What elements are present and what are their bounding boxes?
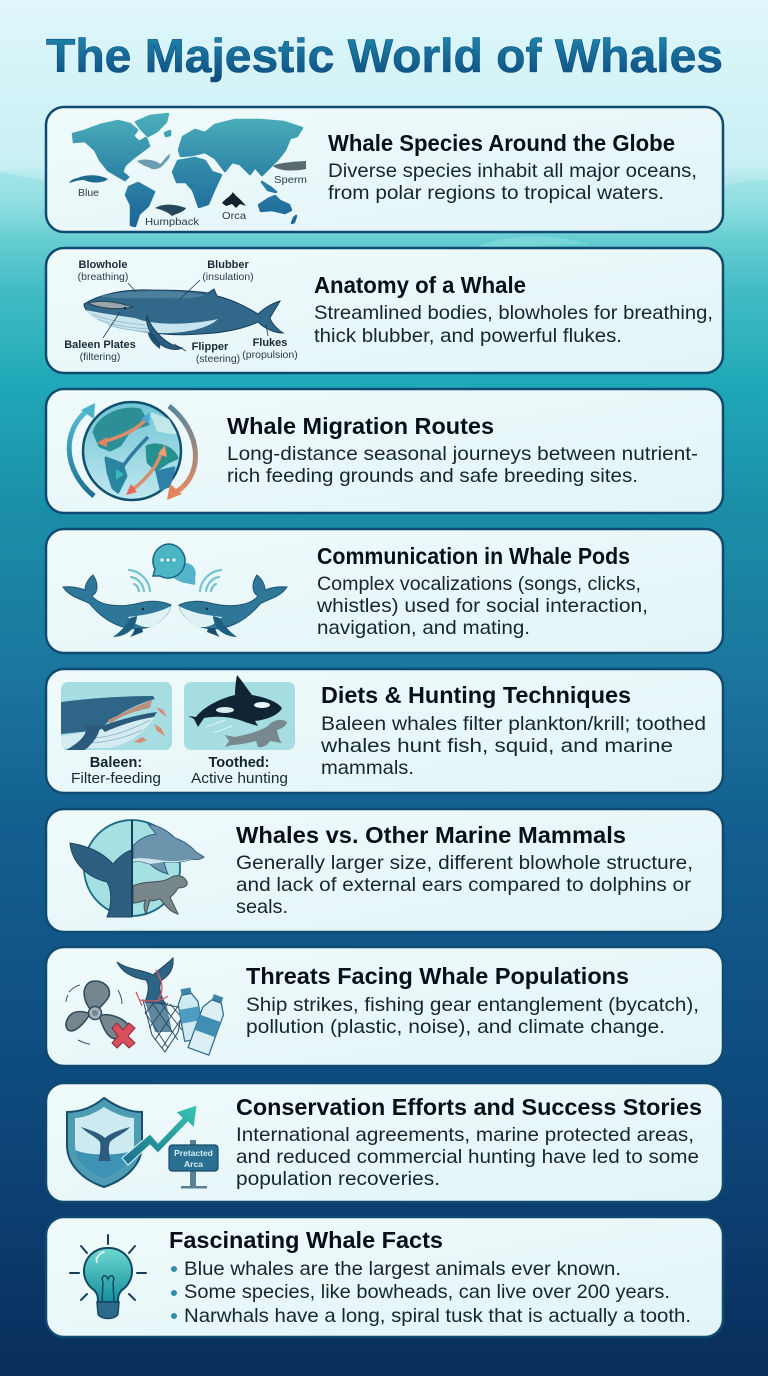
body text: whistles) used for social interaction, bbox=[316, 595, 648, 617]
body text bbox=[246, 994, 699, 1038]
label: Sperm: Sperm bbox=[274, 174, 307, 186]
body text: population recoveries. bbox=[236, 1168, 440, 1190]
heading: Fascinating Whale Facts bbox=[169, 1227, 443, 1253]
bullet list: Some species, like bowheads, can live over 200 years. bbox=[184, 1281, 670, 1303]
body text: Generally larger size, different blowhole structure, bbox=[236, 852, 693, 874]
sign: protected area: Pretacted bbox=[174, 1148, 213, 1158]
label: Blue: Blue bbox=[78, 187, 99, 199]
body text: Complex vocalizations (songs, clicks, bbox=[317, 573, 641, 595]
body text: mammals. bbox=[321, 757, 414, 779]
icon: rising arrow bbox=[122, 1105, 197, 1165]
label: blubber: (insulation) bbox=[202, 271, 254, 283]
heading: Whale Migration Routes bbox=[227, 413, 494, 439]
label: flipper: Flipper bbox=[192, 341, 229, 353]
body text bbox=[320, 713, 706, 779]
icon: globe with migration arrows bbox=[69, 402, 195, 500]
illustration: orca and seal bbox=[184, 675, 295, 750]
icon: left whale bbox=[63, 575, 171, 637]
body text bbox=[236, 852, 693, 918]
body text: Long-distance seasonal journeys between nutrient- bbox=[227, 443, 698, 465]
heading: Anatomy of a Whale bbox=[314, 272, 526, 298]
world map bbox=[73, 114, 302, 226]
icon: plastic bottles bbox=[176, 987, 229, 1055]
body text bbox=[227, 443, 698, 487]
body text bbox=[314, 302, 713, 347]
body text: International agreements, marine protected areas, bbox=[236, 1124, 694, 1146]
label: blubber bbox=[202, 259, 254, 283]
body text: from polar regions to tropical waters. bbox=[328, 182, 664, 204]
sign: protected area: Arca bbox=[184, 1159, 203, 1169]
body text: Ship strikes, fishing gear entanglement (bycatch), bbox=[246, 994, 699, 1016]
icon: propeller bbox=[66, 981, 129, 1044]
label: flipper: (steering) bbox=[196, 353, 240, 365]
heading: Conservation Efforts and Success Stories bbox=[236, 1094, 702, 1120]
icon: right whale bbox=[179, 575, 287, 637]
icon: blue whale bbox=[69, 175, 108, 183]
label: blowhole: (breathing) bbox=[78, 271, 128, 283]
body text: whales hunt fish, squid, and marine bbox=[320, 735, 673, 757]
label: toothed active hunting: Toothed: bbox=[209, 755, 269, 771]
panel: diets and hunting bbox=[46, 669, 723, 793]
panel: communication in pods bbox=[46, 529, 723, 653]
bullet list: Blue whales are the largest animals ever known. bbox=[184, 1258, 621, 1280]
bullet list: Narwhals have a long, spiral tusk that is actually a tooth. bbox=[184, 1305, 691, 1327]
heading: Diets & Hunting Techniques bbox=[321, 682, 631, 708]
icon: speech bubbles bbox=[153, 544, 197, 586]
body text: seals. bbox=[236, 896, 288, 918]
icon: comparison circle bbox=[70, 820, 204, 917]
label: baleen filter-feeding: Baleen: bbox=[90, 755, 142, 771]
body text: Streamlined bodies, blowholes for breathing, bbox=[314, 302, 713, 324]
label: baleen plates bbox=[64, 339, 136, 363]
sign: protected area bbox=[169, 1140, 218, 1188]
body text: and reduced commercial hunting have led to some bbox=[236, 1146, 699, 1168]
icon: humpback whale bbox=[155, 205, 186, 216]
label: baleen plates: (filtering) bbox=[80, 351, 120, 363]
icon: red cross bbox=[112, 1023, 135, 1048]
label: toothed active hunting bbox=[191, 755, 288, 787]
body text: and lack of external ears compared to dolphins or bbox=[236, 874, 692, 896]
illustration: baleen whale bbox=[61, 682, 172, 752]
icon: whale tail in net bbox=[117, 958, 184, 1052]
body text: rich feeding grounds and safe breeding sites. bbox=[227, 465, 638, 487]
icon: sperm whale bbox=[273, 161, 306, 171]
label: flipper bbox=[192, 341, 240, 365]
label: flukes: (propulsion) bbox=[242, 349, 298, 361]
label: Orca: Orca bbox=[222, 210, 246, 222]
panel: conservation bbox=[46, 1083, 723, 1202]
body text: Baleen whales filter plankton/krill; toothed bbox=[321, 713, 706, 735]
body text bbox=[328, 160, 697, 204]
body text: pollution (plastic, noise), and climate change. bbox=[246, 1016, 665, 1038]
label: toothed active hunting: Active hunting bbox=[191, 771, 288, 787]
heading: Whales vs. Other Marine Mammals bbox=[236, 822, 626, 848]
icon: sound waves bbox=[129, 570, 221, 591]
title: The Majestic World of Whales bbox=[46, 29, 723, 82]
panel: fascinating facts bbox=[46, 1217, 723, 1337]
icon: orca bbox=[222, 192, 246, 208]
label: blubber: Blubber bbox=[207, 259, 249, 271]
panel: whale species around the globe bbox=[46, 107, 723, 232]
whale diagram bbox=[84, 280, 283, 351]
panel: whales vs other marine mammals bbox=[46, 809, 723, 932]
icon: whale over Atlantic bbox=[137, 154, 170, 169]
label: Humpback: Humpback bbox=[145, 216, 200, 228]
body text bbox=[316, 573, 648, 639]
icon: light bulb bbox=[70, 1235, 146, 1318]
body text: thick blubber, and powerful flukes. bbox=[314, 325, 622, 347]
label: flukes: Flukes bbox=[253, 337, 287, 349]
body text: Diverse species inhabit all major oceans, bbox=[328, 160, 697, 182]
panel: anatomy of a whale bbox=[46, 248, 723, 373]
heading: Communication in Whale Pods bbox=[317, 543, 630, 569]
label: blowhole: Blowhole bbox=[79, 259, 127, 271]
label: baleen plates: Baleen Plates bbox=[64, 339, 136, 351]
panel: migration routes bbox=[46, 389, 723, 513]
label: baleen filter-feeding bbox=[71, 755, 161, 787]
label: baleen filter-feeding: Filter-feeding bbox=[71, 771, 161, 787]
panel: threats bbox=[46, 947, 723, 1066]
icon: shield with whale tail bbox=[67, 1098, 142, 1187]
label: blowhole bbox=[78, 259, 128, 283]
body text: navigation, and mating. bbox=[317, 617, 530, 639]
label: flukes bbox=[242, 337, 298, 361]
heading: Threats Facing Whale Populations bbox=[246, 963, 629, 989]
heading: Whale Species Around the Globe bbox=[328, 130, 675, 156]
body text bbox=[236, 1124, 699, 1190]
bullet list bbox=[171, 1258, 691, 1327]
